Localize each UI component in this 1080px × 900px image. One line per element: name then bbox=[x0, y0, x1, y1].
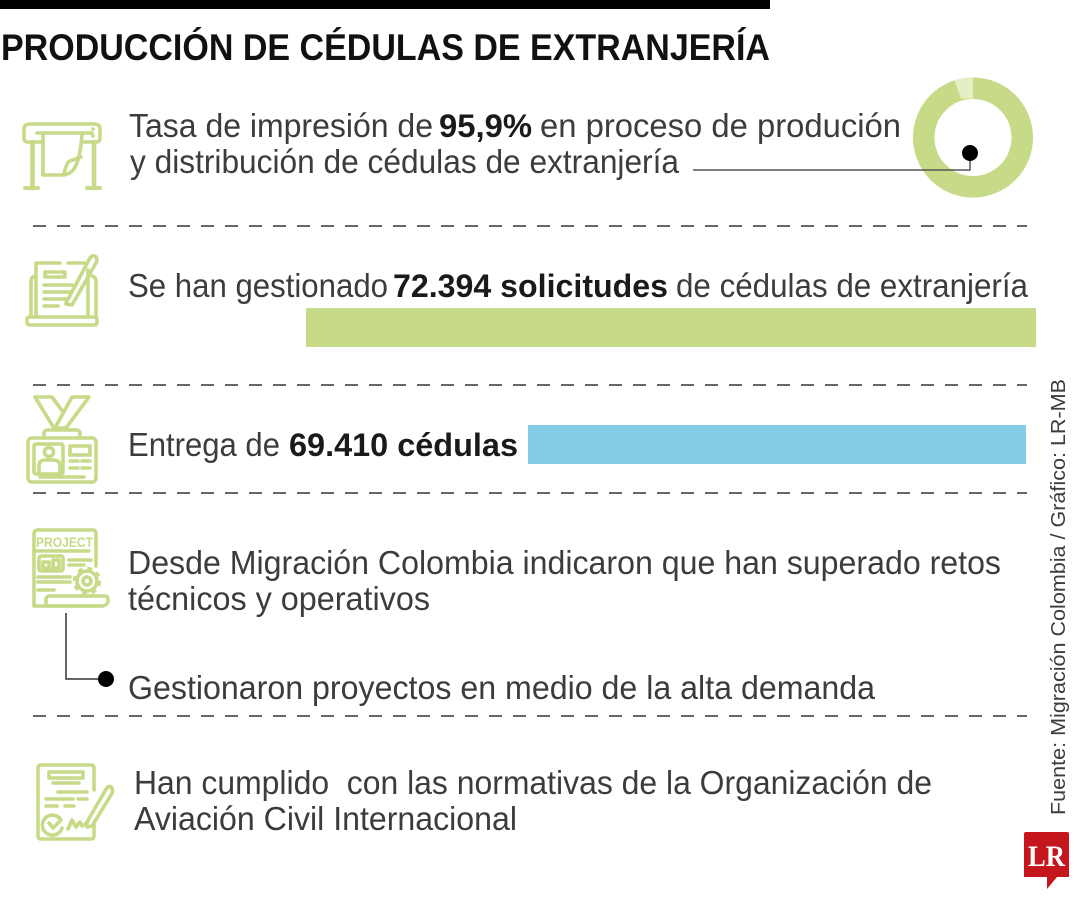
panel: requests bbox=[27, 256, 1036, 347]
text: challenges bbox=[128, 544, 1001, 617]
text: requests: de cédulas de extranjería bbox=[676, 267, 1029, 304]
text: challenges: Desde Migración Colombia indicaron que han superado retos bbox=[128, 544, 1001, 581]
icon: project document bbox=[34, 530, 108, 606]
bar: 69.410 bbox=[528, 425, 1026, 464]
text: print rate: y distribución de cédulas de extranjería bbox=[130, 143, 680, 180]
text: deliveries: 69.410 cédulas bbox=[289, 427, 518, 463]
panel: deliveries bbox=[28, 397, 1026, 482]
text: requests: 72.394 solicitudes bbox=[393, 268, 668, 304]
logo: LR bbox=[1024, 832, 1069, 889]
text: print rate: 95,9% bbox=[439, 108, 532, 144]
panel: challenges bbox=[34, 530, 1001, 706]
bar: 72.394 bbox=[306, 308, 1036, 347]
text: challenges: técnicos y operativos bbox=[128, 580, 430, 617]
text: deliveries: Entrega de bbox=[128, 426, 280, 463]
text: print rate bbox=[129, 107, 901, 180]
text: regulations bbox=[134, 764, 932, 837]
text: print rate: Tasa de impresión de bbox=[129, 107, 433, 144]
icon: project document: PROJECT bbox=[36, 534, 93, 550]
text: regulations: Han cumplido con las normativas de la Organización de bbox=[134, 764, 932, 801]
callout line and dot bbox=[693, 145, 978, 170]
panel: print rate bbox=[24, 78, 1022, 188]
text: regulations: Aviación Civil Internacional bbox=[134, 800, 517, 837]
source credit: Fuente: Migración Colombia / Gráfico: LR-MB bbox=[1048, 379, 1070, 815]
text: projects: Gestionaron proyectos en medio de la alta demanda bbox=[128, 669, 876, 706]
title bbox=[0, 0, 770, 68]
icon: printer bbox=[24, 124, 100, 188]
panel: regulations bbox=[38, 764, 932, 839]
text: deliveries bbox=[128, 426, 518, 463]
title: PRODUCCIÓN DE CÉDULAS DE EXTRANJERÍA bbox=[1, 26, 770, 68]
connector line and dot bbox=[66, 613, 114, 687]
text: print rate: en proceso de produción bbox=[540, 107, 901, 144]
icon: notepad and pencil bbox=[27, 256, 97, 325]
text: requests: Se han gestionado bbox=[128, 267, 388, 304]
donut chart: 95.9% bbox=[924, 78, 1022, 187]
icon: ID badge bbox=[28, 397, 96, 482]
text: requests bbox=[128, 267, 1029, 304]
logo: LR: LR bbox=[1028, 840, 1065, 873]
icon: signed document bbox=[38, 765, 112, 839]
